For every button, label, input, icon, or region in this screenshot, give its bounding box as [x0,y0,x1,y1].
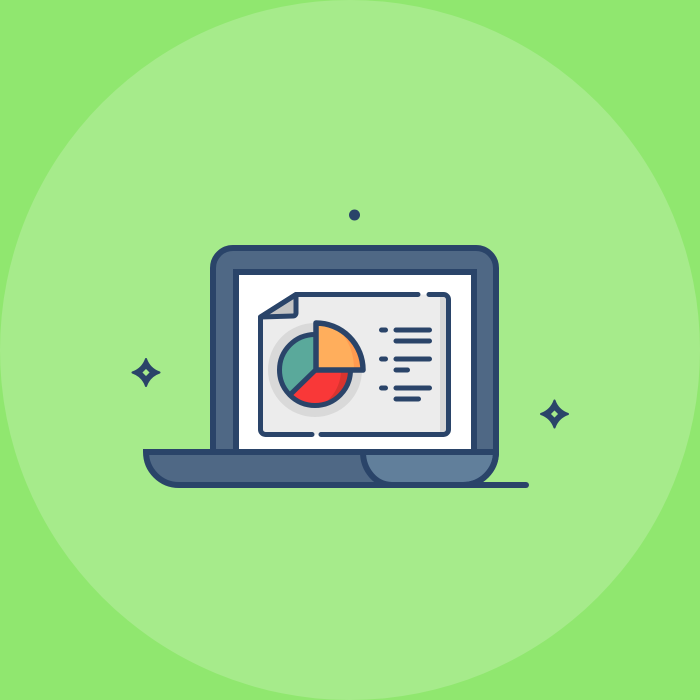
laptop lid [213,248,496,452]
legend lines [382,330,430,399]
document [260,294,448,434]
pie slice: orange [316,323,363,370]
pie ring [280,334,350,406]
base outline [146,452,496,485]
document sheet [260,294,448,434]
laptop base [146,452,526,485]
pie shadow [268,323,362,417]
icon: left sparkle [132,359,160,386]
document outline [260,294,448,434]
laptop screen [239,275,471,450]
ground line [463,482,526,488]
trackpad highlight [363,452,496,485]
document fold [260,294,296,317]
pie chart [268,323,363,417]
icon: dot [349,210,360,220]
pie slice: teal [280,334,316,395]
icon: right sparkle [541,400,568,428]
pie slice: red [290,370,350,405]
